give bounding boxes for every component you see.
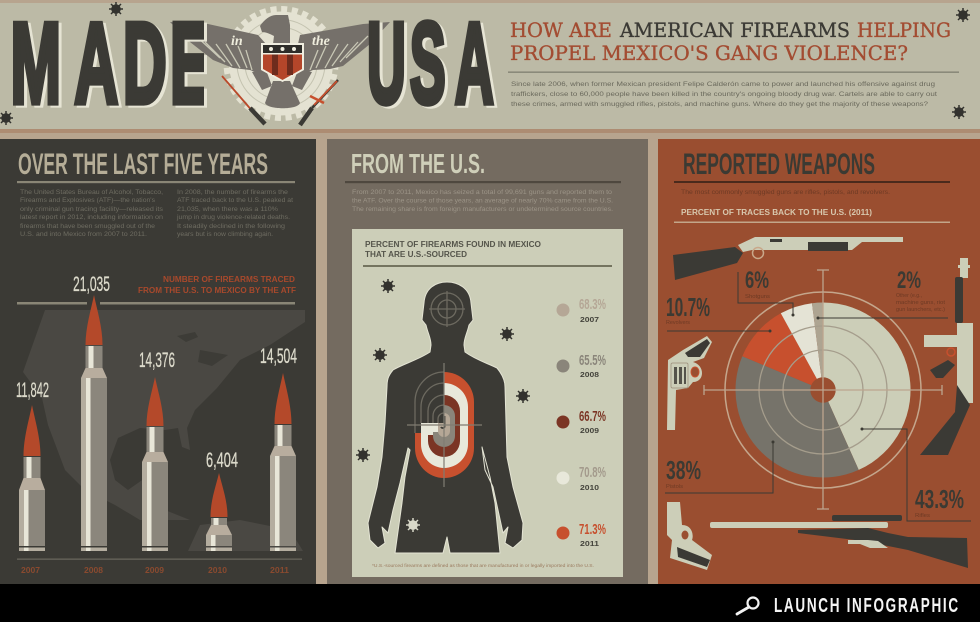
legend: 2010 <box>580 483 599 492</box>
title shadow <box>16 22 498 109</box>
text: intro: The most commonly smuggled guns are rifles, pistols, and revolvers. <box>681 189 890 196</box>
footnote: *U.S.-sourced firearms are defined as those that are manufactured in or legally imported into the U.S. <box>372 563 594 568</box>
panel: over the last five years <box>0 139 316 584</box>
year labels: 2010 <box>208 566 228 575</box>
ring 2009 <box>428 395 460 457</box>
stat: other 2% <box>896 267 946 313</box>
text: column 1: The United States Bureau of Alcohol, Tobacco, <box>20 189 163 196</box>
stat: rifles 43.3%: Rifles <box>915 513 931 519</box>
year labels: 2008 <box>84 566 104 575</box>
title: Made in the USA: USA <box>367 0 494 127</box>
heading: OVER THE LAST FIVE YEARS <box>18 148 268 181</box>
text: column 2: In 2008, the number of firearms the <box>177 189 289 196</box>
text: intro: the ATF. Over the course of those years, an average of nearly 70% came from the U.S. <box>352 198 613 204</box>
text: column 1: firearms that have been smuggled out of the <box>20 223 156 230</box>
slice: shotguns <box>781 303 823 390</box>
icon: revolver <box>667 336 712 430</box>
stat: revolvers 10.7%: Revolvers <box>666 320 691 326</box>
bullet holes <box>0 2 970 125</box>
title shadow: USA <box>370 1 497 129</box>
heading: question: PROPEL MEXICO'S GANG VIOLENCE? <box>510 41 908 65</box>
title: Made in the USA <box>13 19 494 107</box>
heading: question: AMERICAN FIREARMS <box>619 18 850 42</box>
heading: question <box>510 18 951 65</box>
leader lines <box>665 272 971 521</box>
chart legend title: NUMBER OF FIREARMS TRACED <box>163 275 295 284</box>
chart legend title: FROM THE U.S. TO MEXICO BY THE ATF <box>138 286 296 295</box>
chart title: PERCENT OF TRACES BACK TO THE U.S. (2011) <box>681 208 872 217</box>
stat: pistols 38%: Pistols <box>666 484 684 490</box>
year labels: 2007 <box>21 566 41 575</box>
bullet 2010 <box>206 473 232 551</box>
icon: pistol <box>667 502 712 570</box>
icon: shield <box>261 43 304 82</box>
legend: 66.7% <box>579 408 606 425</box>
title shadow: MADE <box>14 2 213 129</box>
bullet holes <box>356 279 530 462</box>
legend: 65.5% <box>579 352 606 369</box>
icon: rifle <box>710 515 968 568</box>
stat: shotguns 6%: Shotguns <box>745 294 771 300</box>
text: intro <box>352 189 613 213</box>
year labels: 2011 <box>270 566 290 575</box>
legend: 70.8% <box>579 464 606 481</box>
bullet values: 11,842 <box>16 379 49 402</box>
ring 2008 <box>433 405 455 447</box>
legend <box>556 296 606 548</box>
text: column 2: jump in drug violence-related deaths. <box>176 214 290 221</box>
stat: other 2%: machine guns, riot <box>896 300 946 306</box>
text: intro: The remaining share is from foreign manufacturers or undetermined source countries. <box>352 206 613 213</box>
card title: THAT ARE U.S.-SOURCED <box>365 250 467 259</box>
chart legend title <box>138 275 296 295</box>
launch label: LAUNCH INFOGRAPHIC <box>774 593 958 617</box>
icon: magnifier <box>737 598 758 614</box>
text: column 2: ATF traced back to the U.S. peaked at <box>177 197 293 204</box>
footer bar <box>0 584 980 622</box>
bullet 2011 <box>270 373 296 551</box>
stat: rifles 43.3% <box>915 484 964 519</box>
bullet 2007 <box>19 405 45 551</box>
stat: revolvers 10.7%: 10.7% <box>666 292 710 322</box>
heading: question: HOW ARE <box>510 18 612 42</box>
ring 2007 <box>438 413 450 437</box>
text: column 1: Firearms and Explosives (ATF)—the nation's <box>20 197 155 204</box>
legend: 2011 <box>580 539 599 548</box>
year labels: 2009 <box>145 566 165 575</box>
text: column 1: U.S. and into Mexico from 2007 to 2011. <box>20 231 147 238</box>
stat: other 2%: gun launchers, etc.) <box>896 307 945 313</box>
text: in: in <box>231 34 243 49</box>
card: target chart <box>352 229 623 577</box>
card title <box>365 240 541 259</box>
slice: other <box>812 302 823 390</box>
ring 2011 <box>415 372 474 478</box>
text: intro: traffickers, close to 60,000 people have been killed in the country's ongoing bloody drug war. Cartels are able to carry out <box>511 91 937 98</box>
bullet values <box>16 273 297 472</box>
text: intro <box>511 81 937 108</box>
map background <box>23 310 305 551</box>
icon: eagle emblem <box>170 10 390 125</box>
icon: machine gun <box>920 258 973 455</box>
text: the: the <box>312 34 330 49</box>
panel: header <box>0 0 980 133</box>
bullet 2008 <box>81 295 107 551</box>
silhouette target <box>368 282 523 553</box>
legend: 71.3% <box>579 521 606 538</box>
text: intro: Since late 2006, when former Mexican president Felipe Calderón came to power and launched his offensive against drug <box>511 81 935 88</box>
bullet values: 21,035 <box>73 273 110 296</box>
icon: shotgun <box>673 237 903 280</box>
light bullet hole <box>406 518 420 532</box>
text: intro: these crimes, armed with smuggled rifles, pistols, and machine guns. Where do they get the majority of these weapons? <box>511 101 928 108</box>
panel: from the U.S. <box>327 139 648 584</box>
slice: rifles <box>823 302 911 470</box>
bullet values: 14,376 <box>139 349 175 372</box>
text: column 2: 21,035, when there was a 110% <box>177 206 278 213</box>
card title: PERCENT OF FIREARMS FOUND IN MEXICO <box>365 240 541 249</box>
bullet 2009 <box>142 377 168 551</box>
text: column 1: latest report in 2012, including information on <box>20 214 164 221</box>
slice: pistols <box>736 356 859 478</box>
chart: bullets <box>19 295 296 551</box>
stat: pistols 38% <box>666 455 701 490</box>
text: column 2: It steadily declined in the following <box>177 223 286 230</box>
heading: question: HELPING <box>857 18 951 42</box>
stat: other 2%: Other (e.g., <box>896 293 922 299</box>
title: Made in the USA: MADE <box>11 0 210 127</box>
legend: 2007 <box>580 315 599 324</box>
stat: revolvers 10.7% <box>666 292 710 326</box>
stat: pistols 38%: 38% <box>666 455 701 485</box>
chart: target pie <box>704 270 942 509</box>
legend: 2008 <box>580 370 599 379</box>
text: intro: From 2007 to 2011, Mexico has seized a total of 99,691 guns and reported them to <box>352 189 613 196</box>
stat: shotguns 6% <box>745 267 771 300</box>
ring 2010 <box>421 383 468 468</box>
text: column 1 <box>20 189 164 238</box>
text: column 2: years but is now climbing again. <box>177 231 273 238</box>
text: column 2 <box>176 189 293 238</box>
bullet values: 6,404 <box>206 449 238 472</box>
heading: FROM THE U.S. <box>351 148 485 179</box>
legend: 2009 <box>580 426 599 435</box>
legend: 68.3% <box>579 296 606 313</box>
stat: shotguns 6%: 6% <box>745 267 769 294</box>
slice: revolvers <box>742 313 823 390</box>
bullet values: 14,504 <box>260 345 297 368</box>
text: column 1: only criminal gun tracing facility—released its <box>20 206 163 213</box>
stat: other 2%: 2% <box>897 267 921 294</box>
year labels <box>21 566 290 575</box>
panel: reported weapons <box>658 139 980 584</box>
